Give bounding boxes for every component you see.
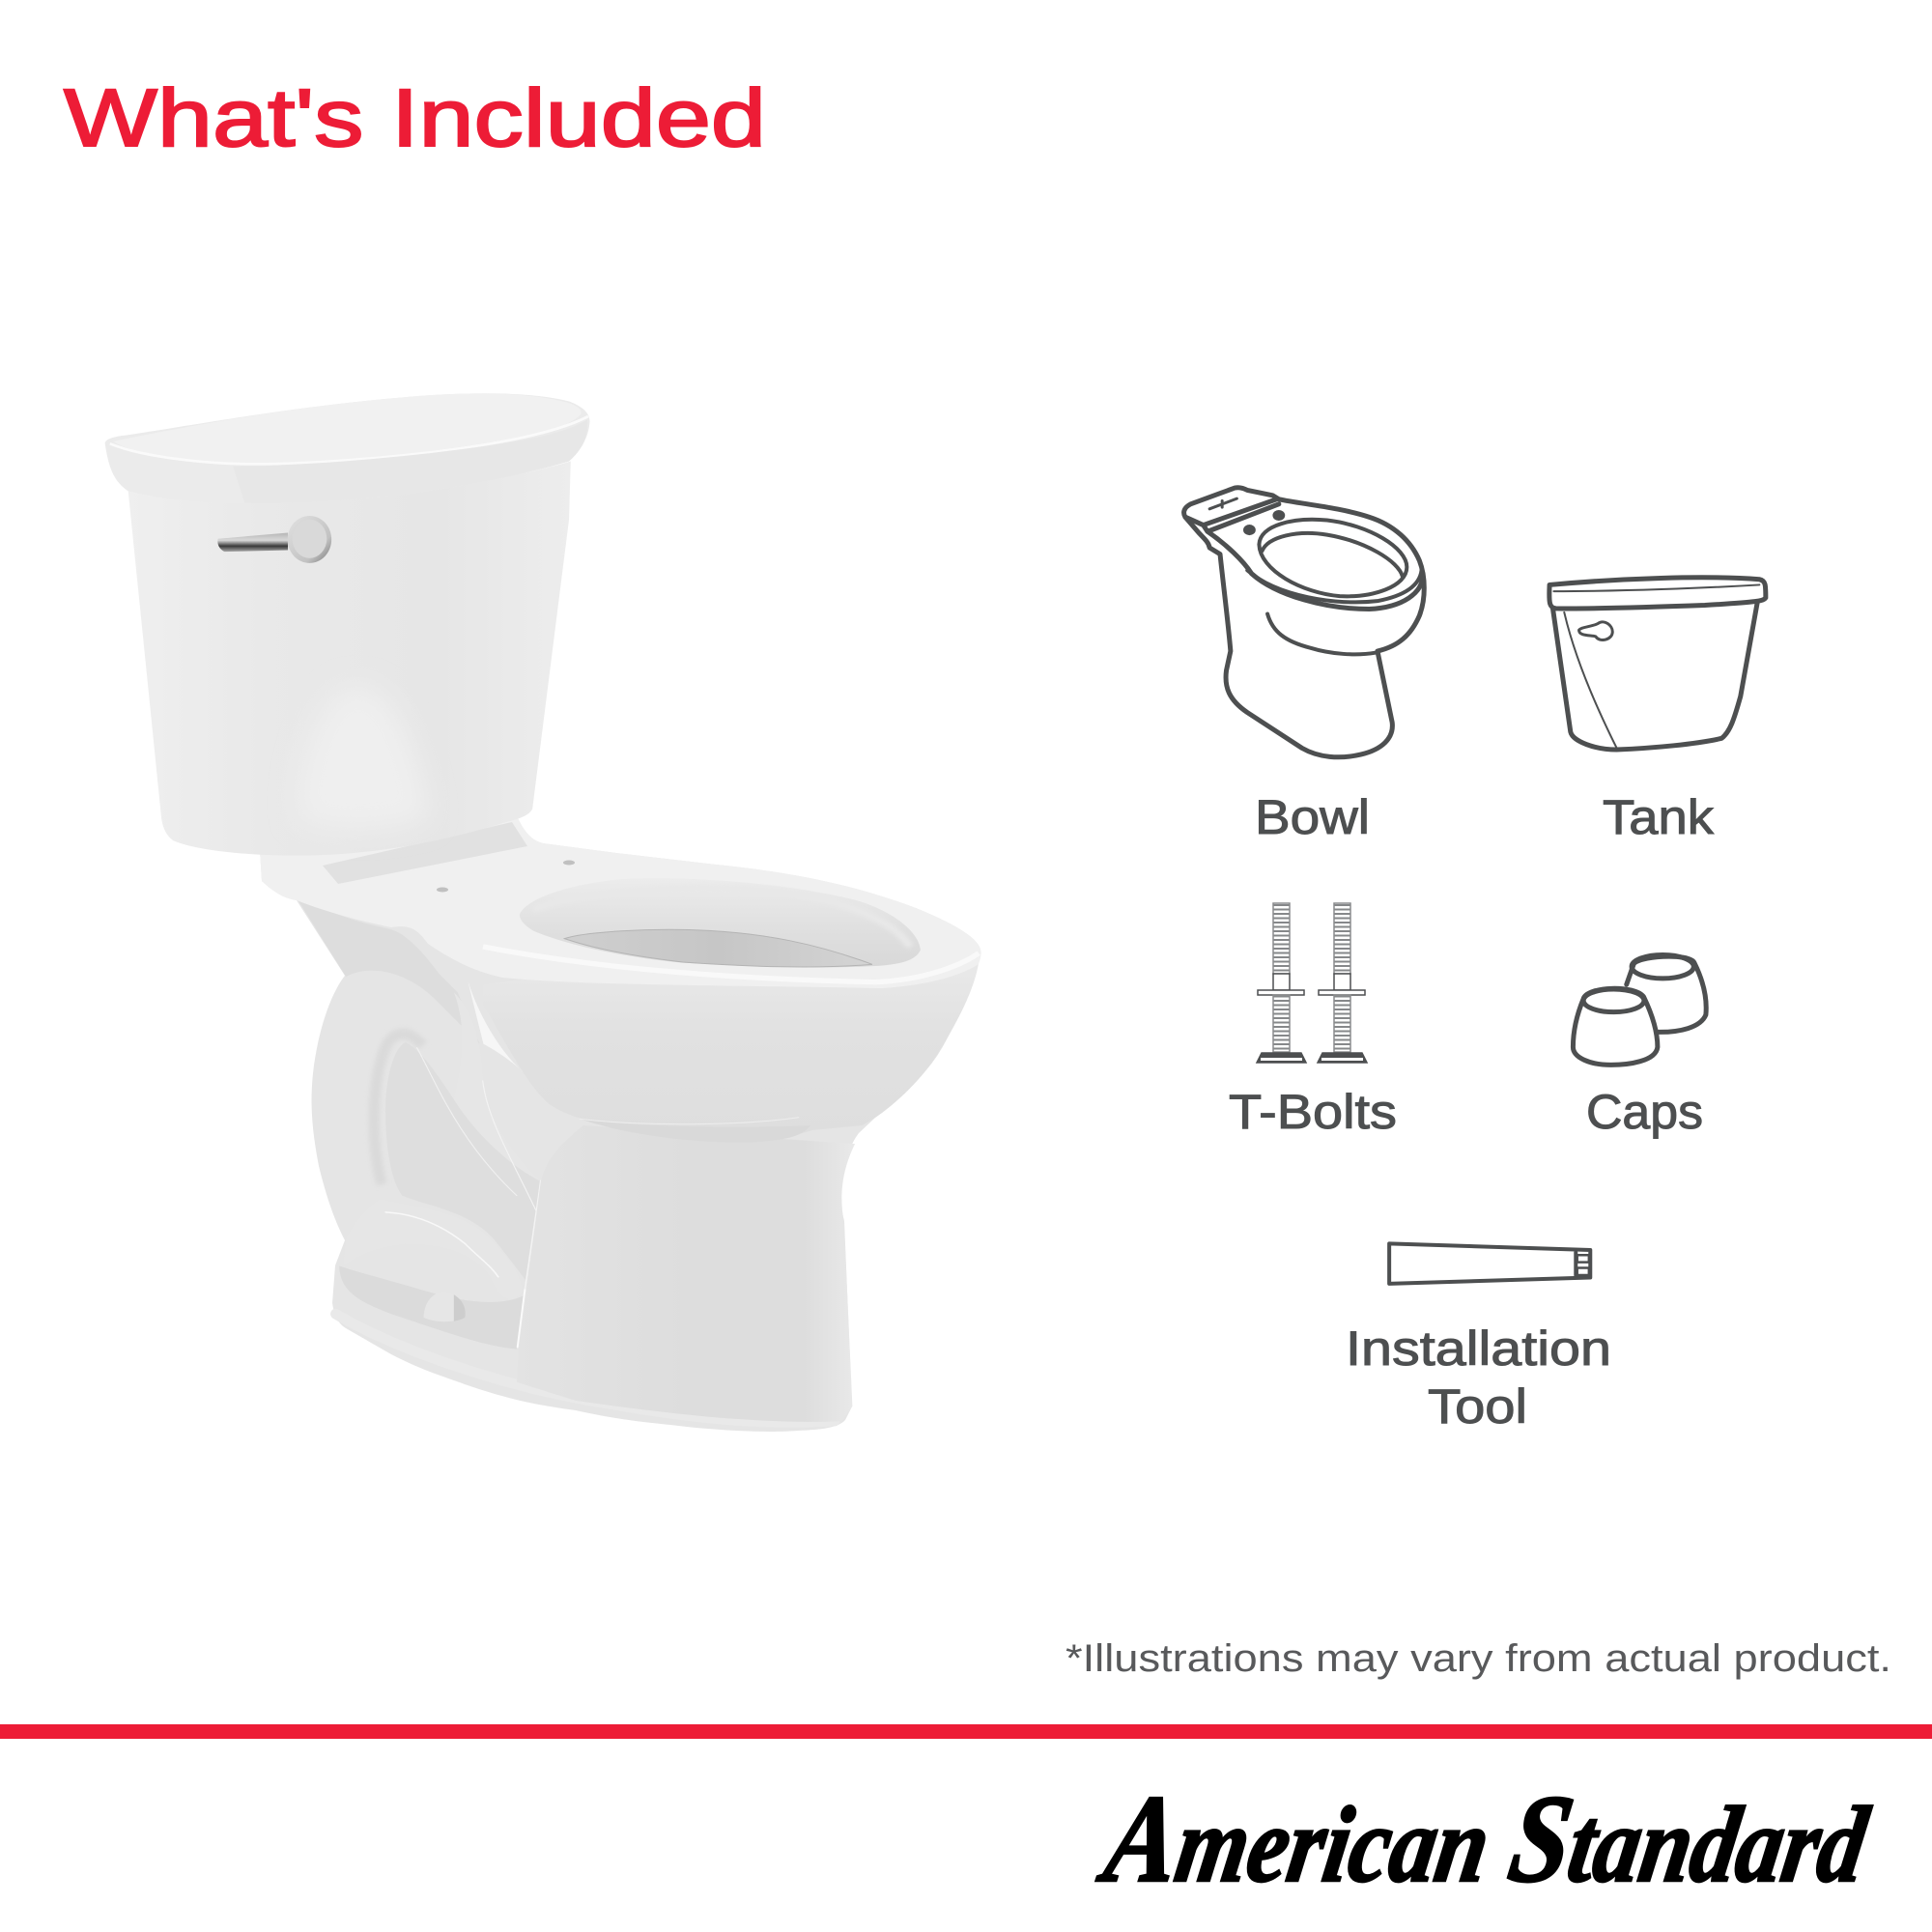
base bolt cap (423, 1292, 466, 1321)
neck under deck (297, 898, 480, 1044)
label: T-Bolts: T-Bolts (1229, 1085, 1397, 1139)
water (564, 929, 872, 967)
icon: installation tool (1389, 1243, 1590, 1284)
toilet bowl silhouette (260, 818, 980, 1432)
label: Installation Tool: Installation (1346, 1321, 1611, 1376)
tank lid (105, 393, 589, 503)
toilet tank (105, 393, 589, 856)
icon: two caps (1573, 954, 1706, 1065)
item: bowl (1184, 488, 1424, 844)
title: What's Included (64, 72, 766, 163)
icon: bowl line drawing (1184, 488, 1424, 757)
window between tube and pedestal (385, 1042, 540, 1281)
red divider bar (0, 1724, 1932, 1739)
icon: tank line drawing (1549, 578, 1766, 750)
seat bolt holes (437, 860, 575, 893)
bowl opening (483, 878, 979, 982)
trapway and base details (297, 898, 855, 1422)
lid front facet (233, 419, 587, 503)
label: Installation Tool: Tool (1428, 1379, 1527, 1434)
label: Tank: Tank (1603, 790, 1715, 844)
front rim highlight (483, 947, 979, 982)
logo: American Standard: American Standard (1092, 1770, 1879, 1909)
tank body (128, 461, 571, 856)
lower trap tube (344, 1199, 523, 1299)
highlights (335, 1048, 835, 1422)
item: tank (1549, 578, 1766, 844)
bowl swoosh highlight (468, 981, 527, 1075)
tube inner shade (374, 1034, 422, 1184)
item: installation tool (1346, 1243, 1611, 1434)
swoosh behind bowl (454, 992, 540, 1180)
bowl front and rim (483, 963, 979, 1143)
bolt right (1318, 903, 1367, 1063)
body soft highlight (298, 686, 429, 829)
item: caps (1573, 954, 1706, 1139)
base basin (339, 1265, 525, 1349)
lid top surface (113, 393, 582, 464)
label: Installation Tool (1346, 1321, 1611, 1434)
product photo: two-piece toilet (105, 393, 981, 1432)
icon: two t-bolts (1257, 903, 1367, 1063)
belly (483, 963, 979, 1141)
pedestal (517, 1125, 855, 1422)
shadow below belly (580, 1119, 810, 1143)
connector recess (323, 822, 527, 884)
deck and rim surface (260, 818, 981, 988)
bolt left (1257, 903, 1306, 1063)
item: t-bolts (1229, 903, 1397, 1139)
label: Bowl: Bowl (1255, 790, 1370, 844)
flush lever (217, 516, 331, 563)
footnote: *Illustrations may vary from actual product. (1065, 1637, 1891, 1680)
label: Caps: Caps (1586, 1085, 1703, 1139)
